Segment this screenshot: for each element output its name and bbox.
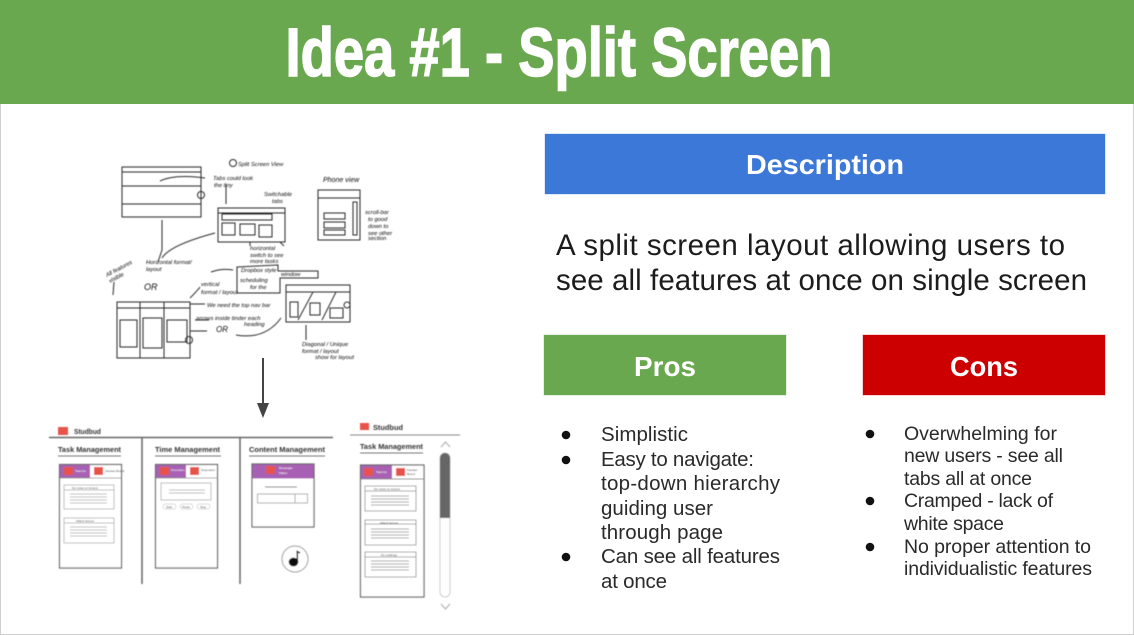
sketch annotations: down to (368, 224, 389, 230)
column: content management: Content Management (249, 445, 325, 454)
sketch annotations: vertical (201, 282, 220, 288)
sketch annotations: visible (108, 272, 126, 285)
description heading (545, 134, 1105, 194)
pros heading (544, 335, 786, 395)
cons list: Overwhelming for (904, 423, 1058, 445)
sketch annotations: for the (250, 285, 267, 291)
pros heading: Pros (634, 351, 696, 382)
cons list: tabs all at once (904, 468, 1032, 490)
column: task management: Kanban Board (105, 469, 125, 473)
sketch annotations (104, 162, 393, 361)
scrollbar (440, 442, 450, 609)
sketch annotations: OR (216, 325, 228, 334)
cons list (866, 423, 1092, 580)
sketch annotations: Diagonal / Unique (302, 342, 349, 348)
description heading: Description (746, 149, 904, 180)
sketch annotations: Horizontal format/ (146, 260, 193, 266)
wireframe: three-column layout (49, 427, 333, 584)
cons list: new users - see all (904, 445, 1063, 467)
sketch annotations: format / layout (302, 349, 339, 355)
wireframe: single column with scrollbar: Do readings (381, 553, 398, 557)
sketch annotations: scheduling (240, 278, 268, 284)
sketch annotations: tabs (272, 199, 283, 205)
icon: music note (282, 546, 308, 572)
wireframe: single column with scrollbar: Watch lecture (380, 521, 399, 525)
sketch annotations: All features (104, 260, 134, 279)
sketch annotations: see other (368, 231, 393, 237)
wireframe: single column with scrollbar: Do notes on lecture (374, 487, 400, 491)
sketch annotations: We need the top nav bar (207, 303, 271, 309)
column: task management: Task Management (58, 445, 121, 454)
sketch annotations: scroll-bar (365, 210, 390, 216)
column: time management (155, 445, 221, 568)
sketch annotations: section (368, 236, 386, 242)
column: time management: Start (166, 505, 173, 509)
column: content management (249, 445, 325, 527)
wireframe: single column with scrollbar (350, 423, 460, 609)
title banner (0, 0, 1134, 104)
pros list: Simplistic (601, 423, 688, 446)
column: task management: Watch lecture (76, 519, 95, 523)
panel: description: see all features at once on single screen (556, 264, 1087, 297)
wireframe: single column with scrollbar: Task list (376, 470, 387, 474)
wireframe: single column with scrollbar: Kanban (407, 468, 418, 472)
panel: pros (544, 335, 786, 593)
description text: A split screen layout allowing users to (556, 229, 1065, 262)
sketch annotations: Switchable (264, 192, 293, 198)
sketch annotations: OR (144, 282, 158, 292)
wireframe: single column with scrollbar: Task Management (360, 442, 423, 451)
sketch annotations: switch to see (250, 253, 284, 259)
column: task management (58, 445, 125, 568)
cons list: No proper attention to (904, 536, 1091, 558)
pros list (562, 423, 781, 593)
panel: description (545, 134, 1105, 297)
wireframe: single column with scrollbar: Board (407, 472, 415, 476)
column: time management: Time Management (155, 445, 220, 454)
hand-drawn sketch (104, 160, 393, 361)
sketch annotations: Phone view (323, 177, 360, 184)
column: content management: Rectangle (279, 466, 293, 470)
sketch annotations: Split Screen View (238, 162, 284, 168)
sketch annotations: layout (146, 267, 162, 273)
pros list: top-down hierarchy (601, 472, 781, 495)
panel: cons (863, 335, 1105, 580)
sketch annotations: the tiny (214, 183, 234, 189)
cons heading (863, 335, 1105, 395)
sketch annotations: more tasks (250, 259, 278, 265)
column: content management: Maker (279, 471, 287, 475)
sketch annotations: Dropbox style (241, 268, 277, 274)
cons list: Cramped - lack of (904, 490, 1054, 512)
arrow (257, 358, 269, 418)
sketch annotations: format / layout (201, 290, 238, 296)
pros list: through page (601, 521, 723, 544)
wireframe: single column with scrollbar: Studbud (373, 423, 403, 432)
sketch annotations: window (281, 272, 301, 278)
cons list: individualistic features (904, 558, 1092, 580)
sketch annotations: to good (368, 217, 388, 223)
title: Idea #1 - Split Screen (286, 14, 832, 91)
wireframe: three-column layout: Studbud (74, 427, 101, 436)
pros list: at once (601, 570, 667, 593)
column: time management: Pomodoro (171, 468, 185, 472)
sketch annotations: arrows inside tinder each (196, 316, 260, 322)
cons list: white space (903, 513, 1004, 535)
sketch annotations: horizontal (250, 246, 276, 252)
sketch annotations: show for layout (315, 355, 354, 361)
column: time management: Reset (182, 505, 190, 509)
column: time management: Stopwatch (201, 468, 215, 472)
pros list: Can see all features (601, 545, 780, 568)
column: time management: Stop (200, 505, 207, 509)
sketch annotations: Tabs could look (213, 176, 254, 182)
column: task management: Do notes on lecture (72, 486, 98, 490)
pros list: guiding user (601, 497, 713, 520)
column: task management: Task list (75, 469, 86, 473)
sketch annotations: heading (244, 322, 265, 328)
cons heading: Cons (950, 351, 1018, 382)
pros list: Easy to navigate: (601, 448, 754, 471)
